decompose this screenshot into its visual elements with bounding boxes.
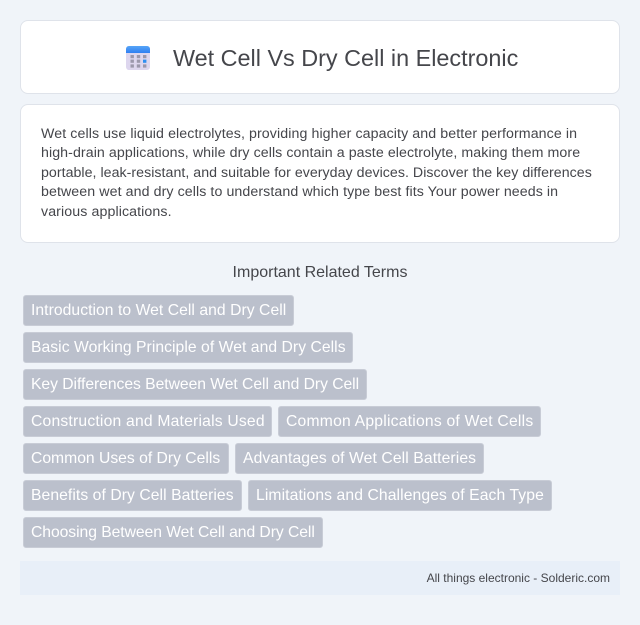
title: Wet Cell Vs Dry Cell in Electronic [173, 45, 518, 71]
tag [248, 480, 552, 511]
tag [23, 480, 242, 511]
intro paragraph: portable, leak-resistant, and suitable for everyday devices. Discover the key differences [41, 165, 592, 181]
tag [235, 443, 484, 474]
intro paragraph: high-drain applications, while dry cells contain a paste electrolyte, making them more [41, 145, 580, 161]
tag [23, 369, 367, 400]
tag: Advantages of Wet Cell Batteries [243, 450, 476, 467]
intro text card [20, 104, 620, 243]
intro paragraph: various applications. [41, 204, 172, 220]
tag: Limitations and Challenges of Each Type [256, 487, 544, 504]
tag [23, 332, 353, 363]
tag: Construction and Materials Used [31, 413, 265, 430]
tag [23, 295, 294, 326]
tag [23, 517, 323, 548]
tag: Key Differences Between Wet Cell and Dry Cell [31, 376, 359, 393]
intro paragraph: Wet cells use liquid electrolytes, providing higher capacity and better performance in [41, 126, 577, 142]
tag: Benefits of Dry Cell Batteries [31, 487, 234, 504]
tag: Common Uses of Dry Cells [31, 450, 220, 467]
tag: Choosing Between Wet Cell and Dry Cell [31, 524, 315, 541]
tag [23, 406, 272, 437]
tag: Basic Working Principle of Wet and Dry Cells [31, 339, 346, 356]
intro paragraph: between wet and dry cells to understand which type best fits Your power needs in [41, 184, 558, 200]
section heading: Important Related Terms [233, 264, 407, 281]
tag [23, 443, 229, 474]
tag: Introduction to Wet Cell and Dry Cell [31, 302, 286, 319]
footer: All things electronic - Solderic.com [427, 571, 610, 585]
tag [278, 406, 541, 437]
icon: calendar grid [126, 46, 150, 70]
footer [20, 561, 620, 595]
title card [20, 20, 620, 94]
intro paragraph [41, 126, 592, 220]
related terms tags [23, 295, 552, 548]
tag: Common Applications of Wet Cells [286, 413, 533, 430]
